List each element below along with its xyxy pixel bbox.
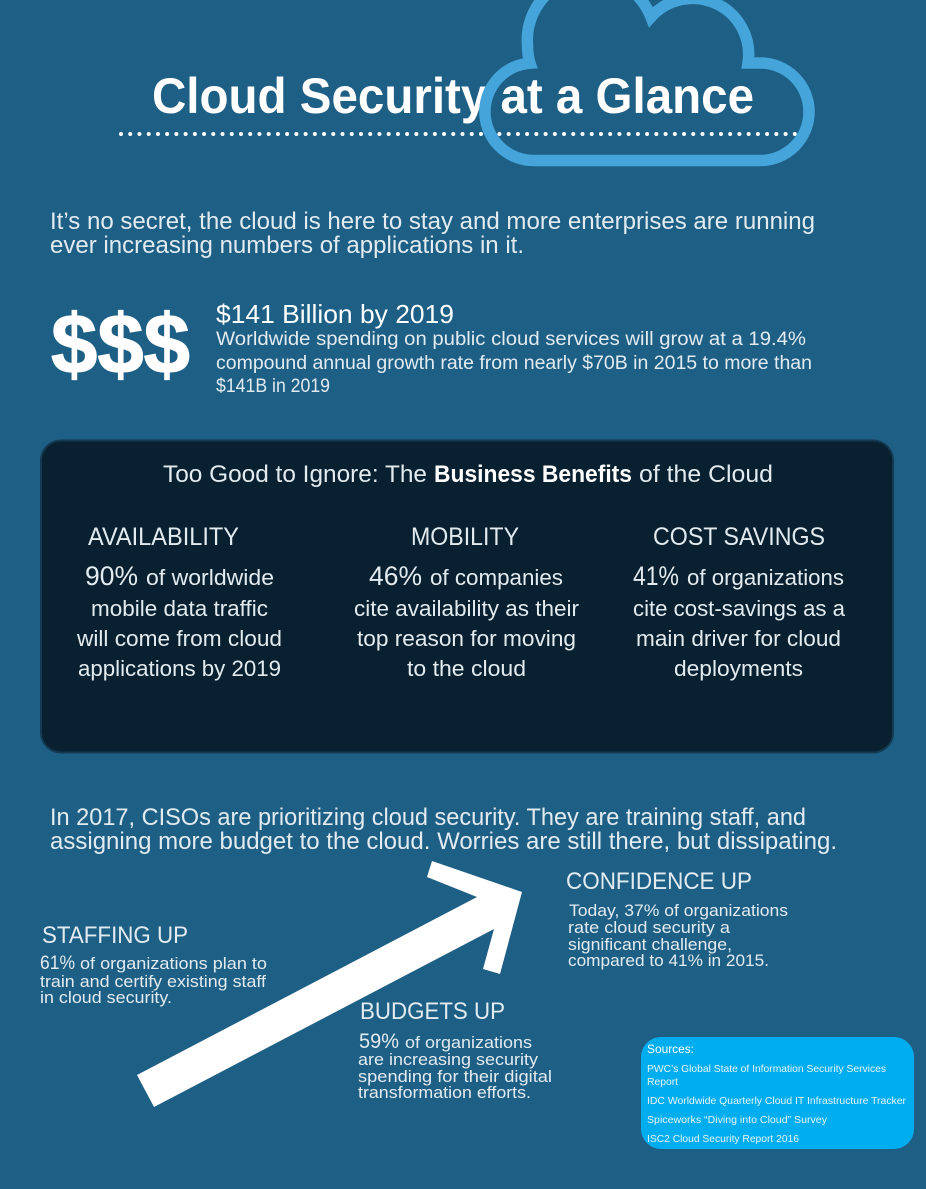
- column: cost savings: [633, 523, 846, 681]
- CISO intro text: In 2017, CISOs are prioritizing cloud security. They are training staff, and: [50, 804, 806, 831]
- sources heading: Sources:: [647, 1042, 694, 1056]
- column: mobility: MOBILITY: [411, 523, 519, 551]
- spending statistic: $141B in 2019: [216, 376, 330, 397]
- column: availability: of worldwide: [146, 565, 274, 590]
- column: mobility: cite availability as their: [354, 596, 579, 621]
- callout: staffing up: in cloud security.: [40, 989, 172, 1007]
- intro text: [50, 208, 815, 259]
- title: Cloud Security at a Glance: [152, 68, 754, 124]
- column: cost savings: cite cost-savings as a: [633, 596, 846, 621]
- spending statistic: Worldwide spending on public cloud services will grow at a 19.4%: [216, 329, 806, 350]
- callout: budgets up: are increasing security: [358, 1051, 539, 1069]
- spending statistic: compound annual growth rate from nearly $70B in 2015 to more than: [216, 353, 812, 374]
- callout: budgets up: [358, 998, 552, 1102]
- sources list: ISC2 Cloud Security Report 2016: [647, 1133, 799, 1145]
- callout: staffing up: [40, 922, 267, 1007]
- column: availability: will come from cloud: [76, 626, 282, 651]
- callout: budgets up: of organizations: [405, 1034, 532, 1052]
- callout: confidence up: Today, 37% of organizations: [569, 902, 788, 920]
- column: mobility: of companies: [430, 565, 563, 590]
- callout: budgets up: BUDGETS UP: [360, 998, 505, 1025]
- column: cost savings: deployments: [674, 656, 803, 681]
- icon: dollar signs: $$$: [51, 297, 190, 391]
- callout: staffing up: 61%: [40, 953, 75, 974]
- panel heading: Too Good to Ignore: The: [163, 461, 427, 488]
- column: mobility: [354, 523, 579, 681]
- arrow: upward trend: [137, 861, 522, 1107]
- sources list: Report: [647, 1076, 678, 1088]
- sources list: [647, 1063, 906, 1145]
- panel: sources: [641, 1037, 914, 1149]
- column: cost savings: 41%: [633, 561, 679, 591]
- column: cost savings: main driver for cloud: [636, 626, 841, 651]
- spending statistic: $141 Billion by 2019: [216, 299, 454, 329]
- column: availability: applications by 2019: [78, 656, 281, 681]
- column: availability: AVAILABILITY: [88, 523, 239, 551]
- callout: budgets up: 59%: [359, 1030, 399, 1053]
- panel heading: Business Benefits: [434, 461, 632, 488]
- callout: confidence up: CONFIDENCE UP: [566, 868, 752, 895]
- panel heading: [163, 461, 773, 488]
- callout: confidence up: significant challenge,: [568, 936, 732, 954]
- intro text: ever increasing numbers of applications in it.: [50, 232, 524, 259]
- icon: cloud outline: [485, 0, 809, 161]
- callout: confidence up: compared to 41% in 2015.: [568, 952, 769, 970]
- sources list: IDC Worldwide Quarterly Cloud IT Infrastructure Tracker: [647, 1095, 906, 1107]
- panel heading: of the Cloud: [639, 461, 773, 488]
- column: availability: mobile data traffic: [91, 596, 268, 621]
- panel: business benefits: [41, 440, 893, 752]
- CISO intro text: assigning more budget to the cloud. Worries are still there, but dissipating.: [50, 828, 837, 855]
- column: mobility: top reason for moving: [357, 626, 576, 651]
- CISO intro text: [50, 804, 837, 855]
- column: availability: 90%: [85, 561, 138, 591]
- callout: staffing up: STAFFING UP: [42, 922, 188, 949]
- spending statistic: [216, 299, 812, 397]
- callout: budgets up: spending for their digital: [358, 1068, 552, 1086]
- intro text: It’s no secret, the cloud is here to stay and more enterprises are running: [50, 208, 815, 235]
- sources list: PWC’s Global State of Information Security Services: [647, 1063, 886, 1075]
- column: availability: [76, 523, 282, 681]
- column: cost savings: COST SAVINGS: [653, 523, 825, 551]
- callout: confidence up: rate cloud security a: [568, 919, 731, 937]
- callout: staffing up: train and certify existing staff: [40, 973, 266, 991]
- column: mobility: 46%: [369, 561, 422, 591]
- column: mobility: to the cloud: [407, 656, 526, 681]
- callout: confidence up: [566, 868, 788, 970]
- column: cost savings: of organizations: [687, 565, 844, 590]
- sources list: Spiceworks “Diving into Cloud” Survey: [647, 1114, 828, 1126]
- callout: staffing up: of organizations plan to: [80, 955, 267, 973]
- callout: budgets up: transformation efforts.: [358, 1084, 531, 1102]
